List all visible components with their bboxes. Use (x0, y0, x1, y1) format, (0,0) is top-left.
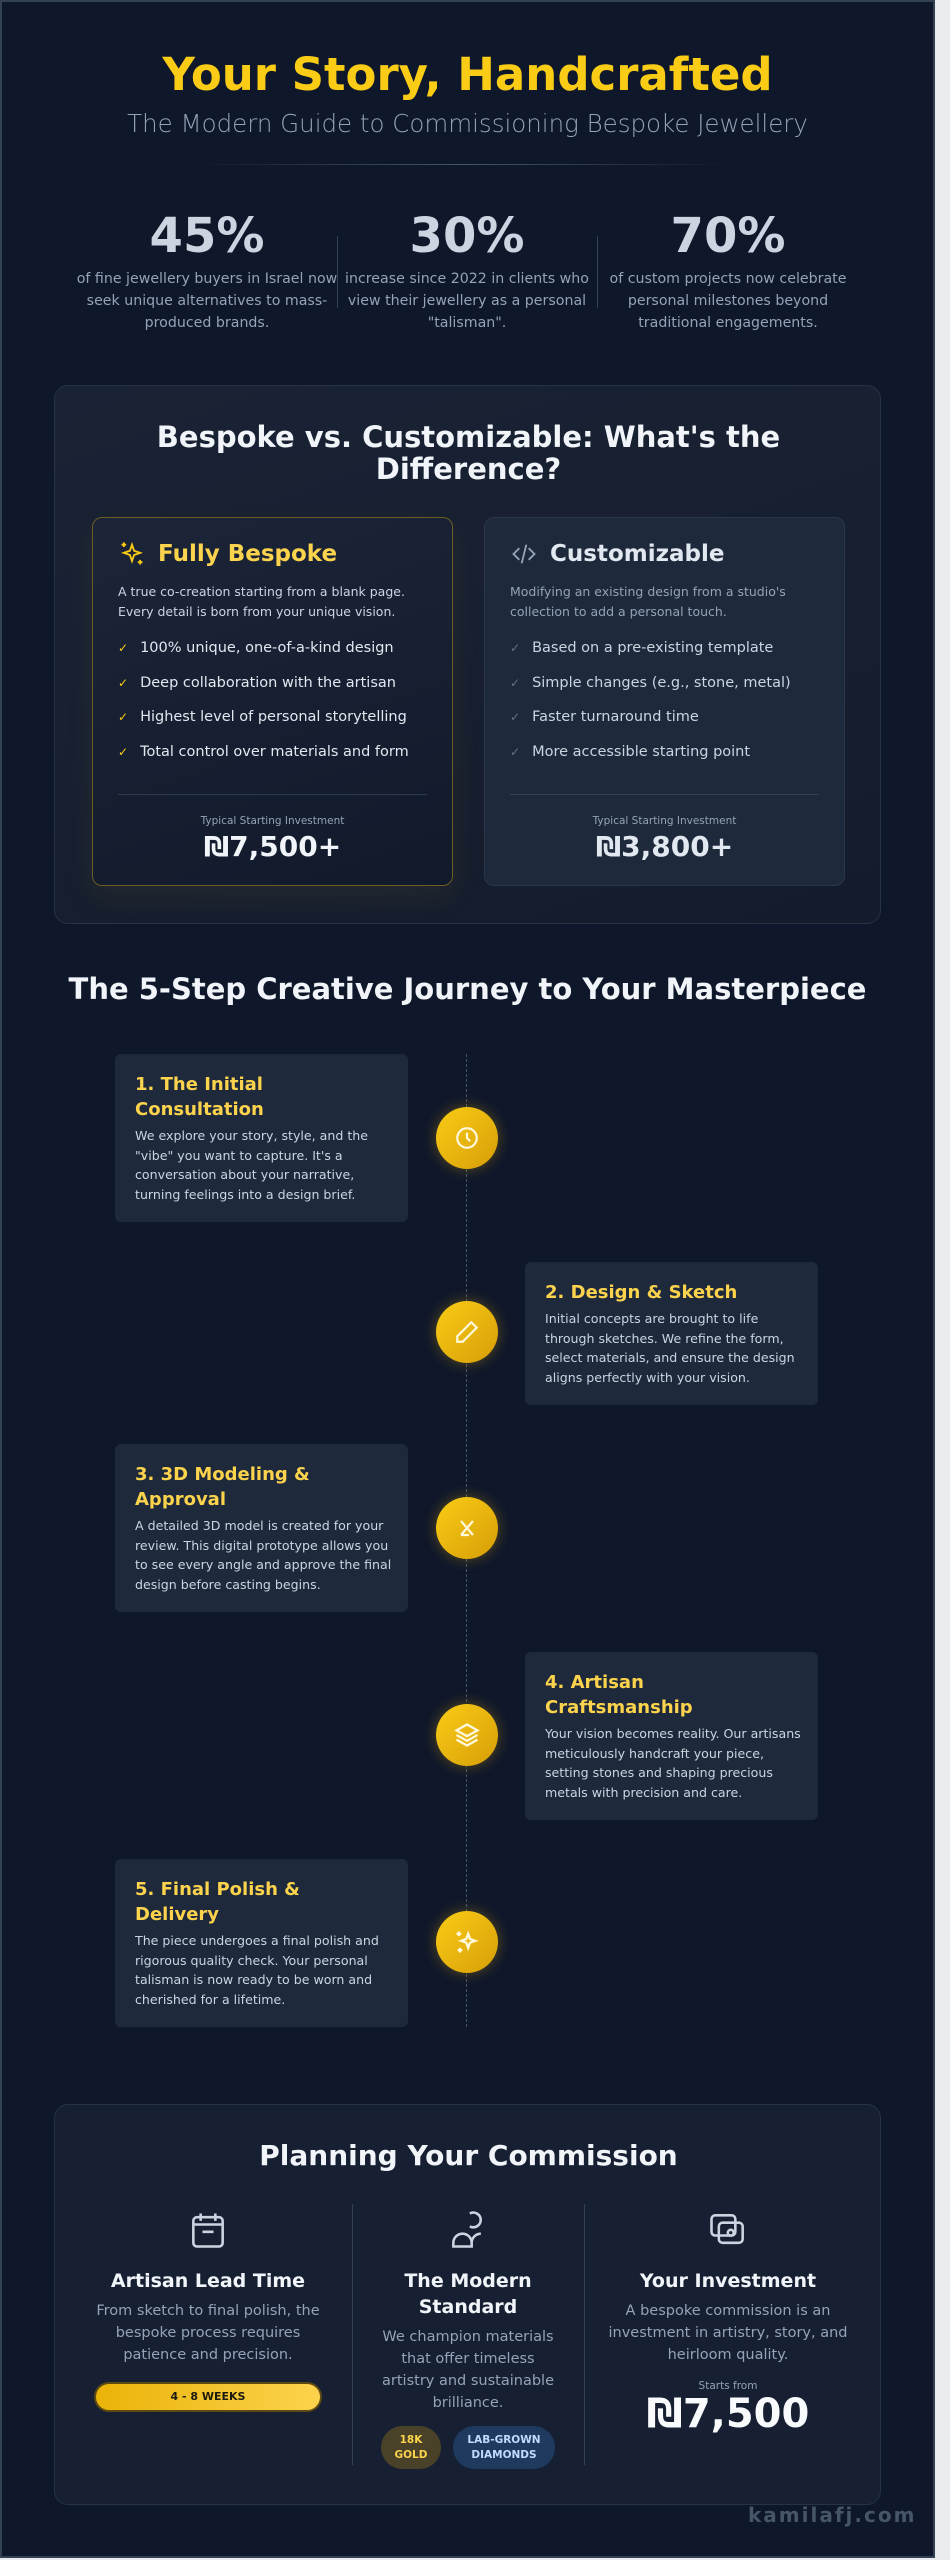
stat 45%: of fine jewellery buyers in Israel now seek unique alternatives to mass-produced brands. (77, 271, 337, 331)
step 4: metals with precision and care. (545, 1784, 742, 1800)
badges: DIAMONDS (471, 2449, 537, 2461)
card: customizable: Faster turnaround time (532, 709, 699, 725)
step 3: A detailed 3D model is created for your (135, 1518, 383, 1533)
panel: planning (54, 2104, 881, 2505)
icon: pencil (436, 1301, 498, 1363)
step 3: 3. 3D Modeling & (135, 1464, 310, 1485)
badges: LAB-GROWN (467, 2434, 541, 2446)
stat 70%: of custom projects now celebrate personal milestones beyond traditional engagements. (610, 271, 846, 331)
comparison heading: Difference? (376, 452, 561, 486)
card: customizable: ✓ (510, 641, 520, 655)
card: fully bespoke: Typical Starting Investment (201, 815, 344, 827)
card: fully bespoke: ₪7,500+ (204, 830, 341, 863)
step 5: rigorous quality check. Your personal (135, 1952, 368, 1968)
step 2: through sketches. We refine the form, (545, 1330, 784, 1346)
card: customizable: Modifying an existing design from a studio's collection to add a personal touch. (510, 584, 786, 619)
step 1: conversation about your narrative, (135, 1167, 354, 1182)
col: modern standard (381, 2211, 555, 2469)
card: fully bespoke: 100% unique, one-of-a-kind design (140, 640, 394, 656)
step 4: setting stones and shaping precious (545, 1765, 773, 1780)
step 5 (115, 1859, 408, 2027)
step 2: select materials, and ensure the design (545, 1350, 795, 1365)
card: customizable: Typical Starting Investment (593, 815, 736, 827)
step 1: 1. The Initial (135, 1074, 263, 1095)
step 5: cherished for a lifetime. (135, 1992, 285, 2006)
card: fully bespoke: ✓ (118, 710, 128, 724)
step 1: Consultation (135, 1099, 264, 1120)
col: modern standard: Standard (419, 2296, 517, 2318)
step 2: aligns perfectly with your vision. (545, 1370, 750, 1384)
card: customizable: More accessible starting point (532, 744, 750, 760)
icon: clock (436, 1107, 498, 1169)
icon: 3d (436, 1497, 498, 1559)
step 4: Your vision becomes reality. Our artisans (545, 1726, 801, 1741)
step 2: Initial concepts are brought to life (545, 1311, 758, 1326)
card: customizable (484, 517, 845, 886)
badges (381, 2426, 555, 2469)
subtitle: The Modern Guide to Commissioning Bespoke Jewellery (127, 109, 808, 138)
col: investment: A bespoke commission is an investment in artistry, story, and heirloom quality. (608, 2303, 848, 2363)
step 4: Craftsmanship (545, 1697, 693, 1718)
card: fully bespoke: ✓ (118, 676, 128, 690)
journey heading: The 5-Step Creative Journey to Your Masterpiece (69, 972, 866, 1006)
stats row (77, 208, 846, 331)
stat 45% (77, 208, 337, 331)
col: modern standard: The Modern (404, 2270, 532, 2292)
step 5: 5. Final Polish & (135, 1879, 300, 1900)
badges: GOLD (395, 2449, 427, 2461)
badges: 18K (400, 2434, 422, 2446)
step 3: design before casting begins. (135, 1576, 321, 1592)
icon: wallet (710, 2214, 744, 2244)
card: fully bespoke: Total control over materials and form (140, 744, 409, 760)
panel: comparison (54, 385, 881, 924)
card: fully bespoke: Deep collaboration with the artisan (140, 674, 396, 690)
step 5: talisman is now ready to be worn and (135, 1972, 372, 1987)
step 3: to see every angle and approve the final (135, 1557, 391, 1572)
icon: layers (436, 1704, 498, 1766)
step 5: Delivery (135, 1904, 219, 1925)
icon: code: Customizable (550, 541, 724, 567)
stat 70% (610, 208, 846, 331)
card: fully bespoke: Highest level of personal storytelling (140, 709, 407, 725)
footer: site: kamilafj.com (748, 2503, 916, 2527)
card: customizable: ✓ (510, 710, 520, 724)
card: fully bespoke: ✓ (118, 641, 128, 655)
step 4: meticulously handcraft your piece, (545, 1746, 764, 1760)
step 4 (525, 1652, 818, 1820)
timeline (466, 1054, 467, 2027)
stat 30%: 30% (410, 208, 524, 264)
col: investment: ₪7,500 (647, 2391, 809, 2437)
step 5: The piece undergoes a final polish and (135, 1933, 379, 1948)
step 3 (115, 1444, 408, 1612)
step 3: review. This digital prototype allows you (135, 1538, 388, 1552)
icon: user (452, 2211, 482, 2248)
card: customizable: Based on a pre-existing template (532, 640, 773, 656)
step 2 (525, 1262, 818, 1405)
pill: weeks: 4 - 8 WEEKS (170, 2390, 245, 2403)
step 1: "vibe" you want to capture. It's a (135, 1148, 343, 1162)
icon: calendar (192, 2214, 224, 2248)
step 3: Approval (135, 1489, 226, 1510)
stat 30% (345, 208, 589, 331)
stat 70%: 70% (671, 208, 785, 264)
icon: sparkle (436, 1911, 498, 1973)
col: lead time: Artisan Lead Time (111, 2270, 305, 2292)
col: investment (608, 2214, 848, 2437)
step 4: 4. Artisan (545, 1672, 644, 1693)
stat 30%: increase since 2022 in clients who view their jewellery as a personal "talisman". (345, 271, 589, 331)
card: customizable: ✓ (510, 676, 520, 690)
stat 45%: 45% (150, 208, 264, 264)
col: investment: Starts from (699, 2380, 757, 2392)
card: customizable: ₪3,800+ (596, 830, 733, 863)
col: modern standard: We champion materials that offer timeless artistry and sustainable brilliance. (382, 2329, 554, 2411)
col: investment: Your Investment (640, 2270, 816, 2292)
card: fully bespoke (92, 517, 453, 886)
step 1: turning feelings into a design brief. (135, 1186, 355, 1202)
comparison heading (157, 420, 780, 486)
title: Your Story, Handcrafted (162, 48, 773, 101)
card: customizable: Simple changes (e.g., stone, metal) (532, 674, 791, 690)
col: lead time: From sketch to final polish, the bespoke process requires patience and precision. (96, 2303, 320, 2363)
col: lead time (94, 2214, 322, 2412)
icon: sparkles: Fully Bespoke (158, 541, 337, 567)
card: fully bespoke: ✓ (118, 744, 128, 758)
step 2: 2. Design & Sketch (545, 1282, 737, 1303)
comparison heading: Bespoke vs. Customizable: What's the (157, 420, 780, 454)
pill: weeks (94, 2382, 322, 2412)
card: customizable: ✓ (510, 744, 520, 758)
planning heading: Planning Your Commission (259, 2139, 678, 2172)
card: fully bespoke: A true co-creation starting from a blank page. Every detail is born from your unique vision. (118, 584, 405, 619)
step 1: We explore your story, style, and the (135, 1128, 368, 1143)
step 1 (115, 1054, 408, 1222)
